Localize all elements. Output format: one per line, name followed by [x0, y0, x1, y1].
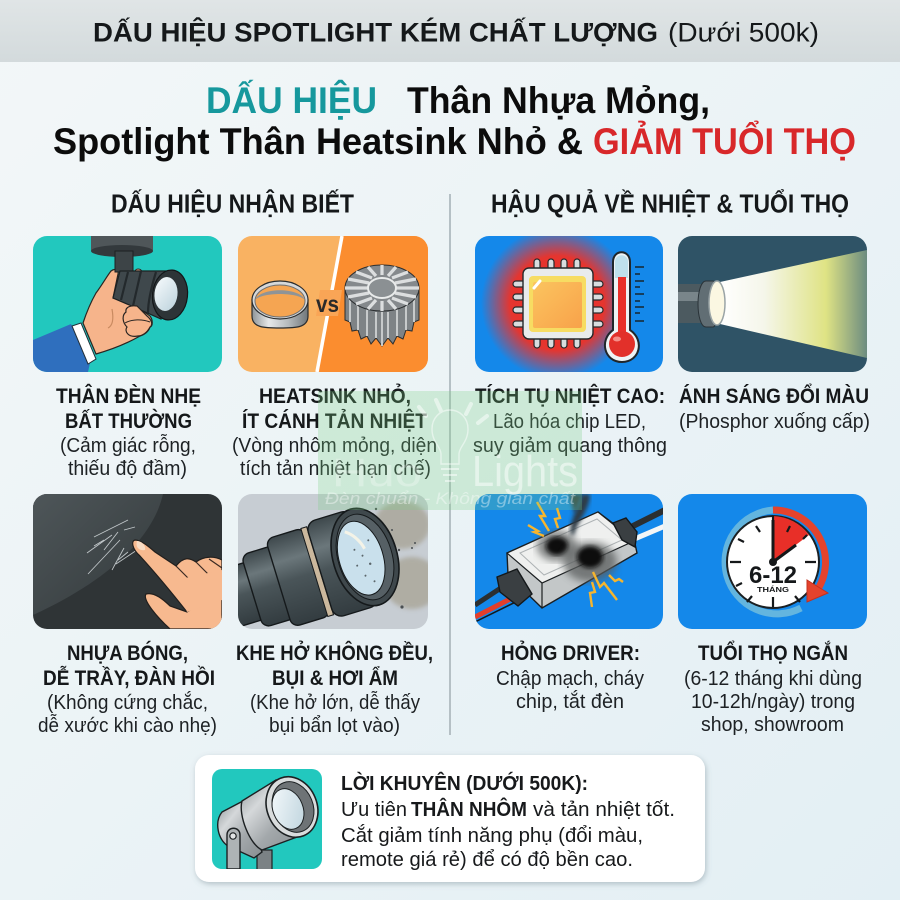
illustration: yellowing light beam [678, 236, 867, 372]
label: driver failure: Chập mạch, cháy [496, 668, 644, 690]
label: small heatsink: (Vòng nhôm mỏng, diện [232, 435, 437, 457]
panel: short lifespan [678, 494, 867, 736]
heading: right column: HẬU QUẢ VỀ NHIỆT & TUỔI THỌ [491, 188, 849, 218]
illustration: dusty lens gap [238, 494, 428, 629]
panel: advice [195, 755, 705, 882]
label: small heatsink: tích tản nhiệt hạn chế) [240, 458, 431, 480]
label: heat build-up [473, 383, 667, 457]
illustration: clock 6-12 months: THÁNG [757, 585, 789, 594]
label: small heatsink [232, 383, 437, 480]
illustration: thin ring vs heatsink [238, 236, 428, 372]
label: light body: THÂN ĐÈN NHẸ [56, 383, 201, 408]
panel: glossy plastic [33, 494, 222, 737]
text: advice [341, 771, 675, 871]
illustration: hand holding spotlight [33, 236, 222, 372]
text: advice: Ưu tiên [341, 798, 407, 821]
header bar [0, 0, 900, 62]
label: driver failure [496, 640, 644, 713]
icon: aluminium spotlight [212, 769, 327, 872]
illustration: clock 6-12 months [678, 494, 867, 629]
label: glossy plastic: dễ xước khi cào nhẹ) [38, 714, 217, 737]
watermark logo [318, 391, 582, 510]
label: light body [56, 383, 201, 480]
watermark logo: Lights [472, 447, 578, 496]
label: driver failure: HỎNG DRIVER: [501, 640, 640, 665]
label: short lifespan: 10-12h/ngày) trong [691, 691, 855, 713]
heading: left column: DẤU HIỆU NHẬN BIẾT [111, 188, 354, 218]
header bar: (Dưới 500k) [668, 18, 819, 48]
label: colour shift: (Phosphor xuống cấp) [679, 411, 870, 433]
text: advice: remote giá rẻ) để có độ bền cao. [341, 848, 633, 871]
title: Thân Nhựa Mỏng, [407, 80, 710, 121]
label: light body: BẤT THƯỜNG [65, 408, 192, 433]
label: small heatsink: HEATSINK NHỎ, [259, 383, 411, 408]
title: DẤU HIỆU [206, 79, 377, 121]
label: heat build-up: suy giảm quang thông [473, 435, 667, 457]
title: GIẢM TUỔI THỌ [593, 119, 856, 162]
label: glossy plastic [38, 640, 217, 737]
text: advice: LỜI KHUYÊN (DƯỚI 500K): [341, 771, 588, 795]
label: short lifespan: shop, showroom [701, 714, 844, 736]
text: advice: và tản nhiệt tốt. [533, 798, 675, 821]
label: uneven gaps: KHE HỞ KHÔNG ĐỀU, [236, 640, 433, 665]
label: light body: (Cảm giác rỗng, [60, 434, 196, 457]
label: short lifespan [684, 640, 862, 736]
watermark logo: Đèn chuẩn - Không gian chất [325, 489, 576, 508]
panel: heat build-up [473, 236, 667, 457]
label: short lifespan: (6-12 tháng khi dùng [684, 668, 862, 690]
text: advice: Cắt giảm tính năng phụ (đổi màu, [341, 824, 643, 847]
panel: colour shift [678, 236, 870, 433]
panel: light body [33, 236, 222, 480]
label: light body: thiếu độ đầm) [68, 458, 187, 480]
label: uneven gaps: bụi bẩn lọt vào) [269, 715, 400, 737]
header bar: DẤU HIỆU SPOTLIGHT KÉM CHẤT LƯỢNG [93, 18, 658, 48]
label: uneven gaps: BỤI & HƠI ẨM [272, 665, 398, 690]
illustration: burnt LED driver [475, 494, 665, 629]
text: advice: THÂN NHÔM [411, 797, 527, 821]
label: colour shift [679, 383, 870, 433]
label: heat build-up: TÍCH TỤ NHIỆT CAO: [475, 383, 665, 408]
title [53, 79, 856, 162]
label: heat build-up: Lão hóa chip LED, [493, 411, 646, 433]
label: uneven gaps [236, 640, 433, 737]
label: glossy plastic: NHỰA BÓNG, [67, 640, 188, 665]
label: glossy plastic: DỄ TRẦY, ĐÀN HỒI [43, 664, 215, 690]
panel: driver failure [475, 494, 665, 713]
label: glossy plastic: (Không cứng chắc, [47, 691, 208, 714]
label: small heatsink: ÍT CÁNH TẢN NHIỆT [242, 408, 427, 433]
panel: small heatsink [232, 236, 437, 480]
illustration: finger scratching plastic [33, 494, 222, 629]
illustration: hot LED chip and thermometer [475, 236, 663, 372]
label: colour shift: ÁNH SÁNG ĐỔI MÀU [679, 383, 869, 408]
illustration: thin ring vs heatsink: vs [316, 291, 339, 317]
label: short lifespan: TUỔI THỌ NGẮN [698, 640, 848, 665]
illustration: clock 6-12 months: 6-12 [749, 562, 797, 589]
watermark logo: Huo [332, 451, 422, 495]
panel: uneven gaps [237, 494, 432, 736]
label: driver failure: chip, tắt đèn [516, 690, 624, 713]
title: Spotlight Thân Heatsink Nhỏ & [53, 121, 583, 162]
label: uneven gaps: (Khe hở lớn, dễ thấy [250, 691, 420, 714]
